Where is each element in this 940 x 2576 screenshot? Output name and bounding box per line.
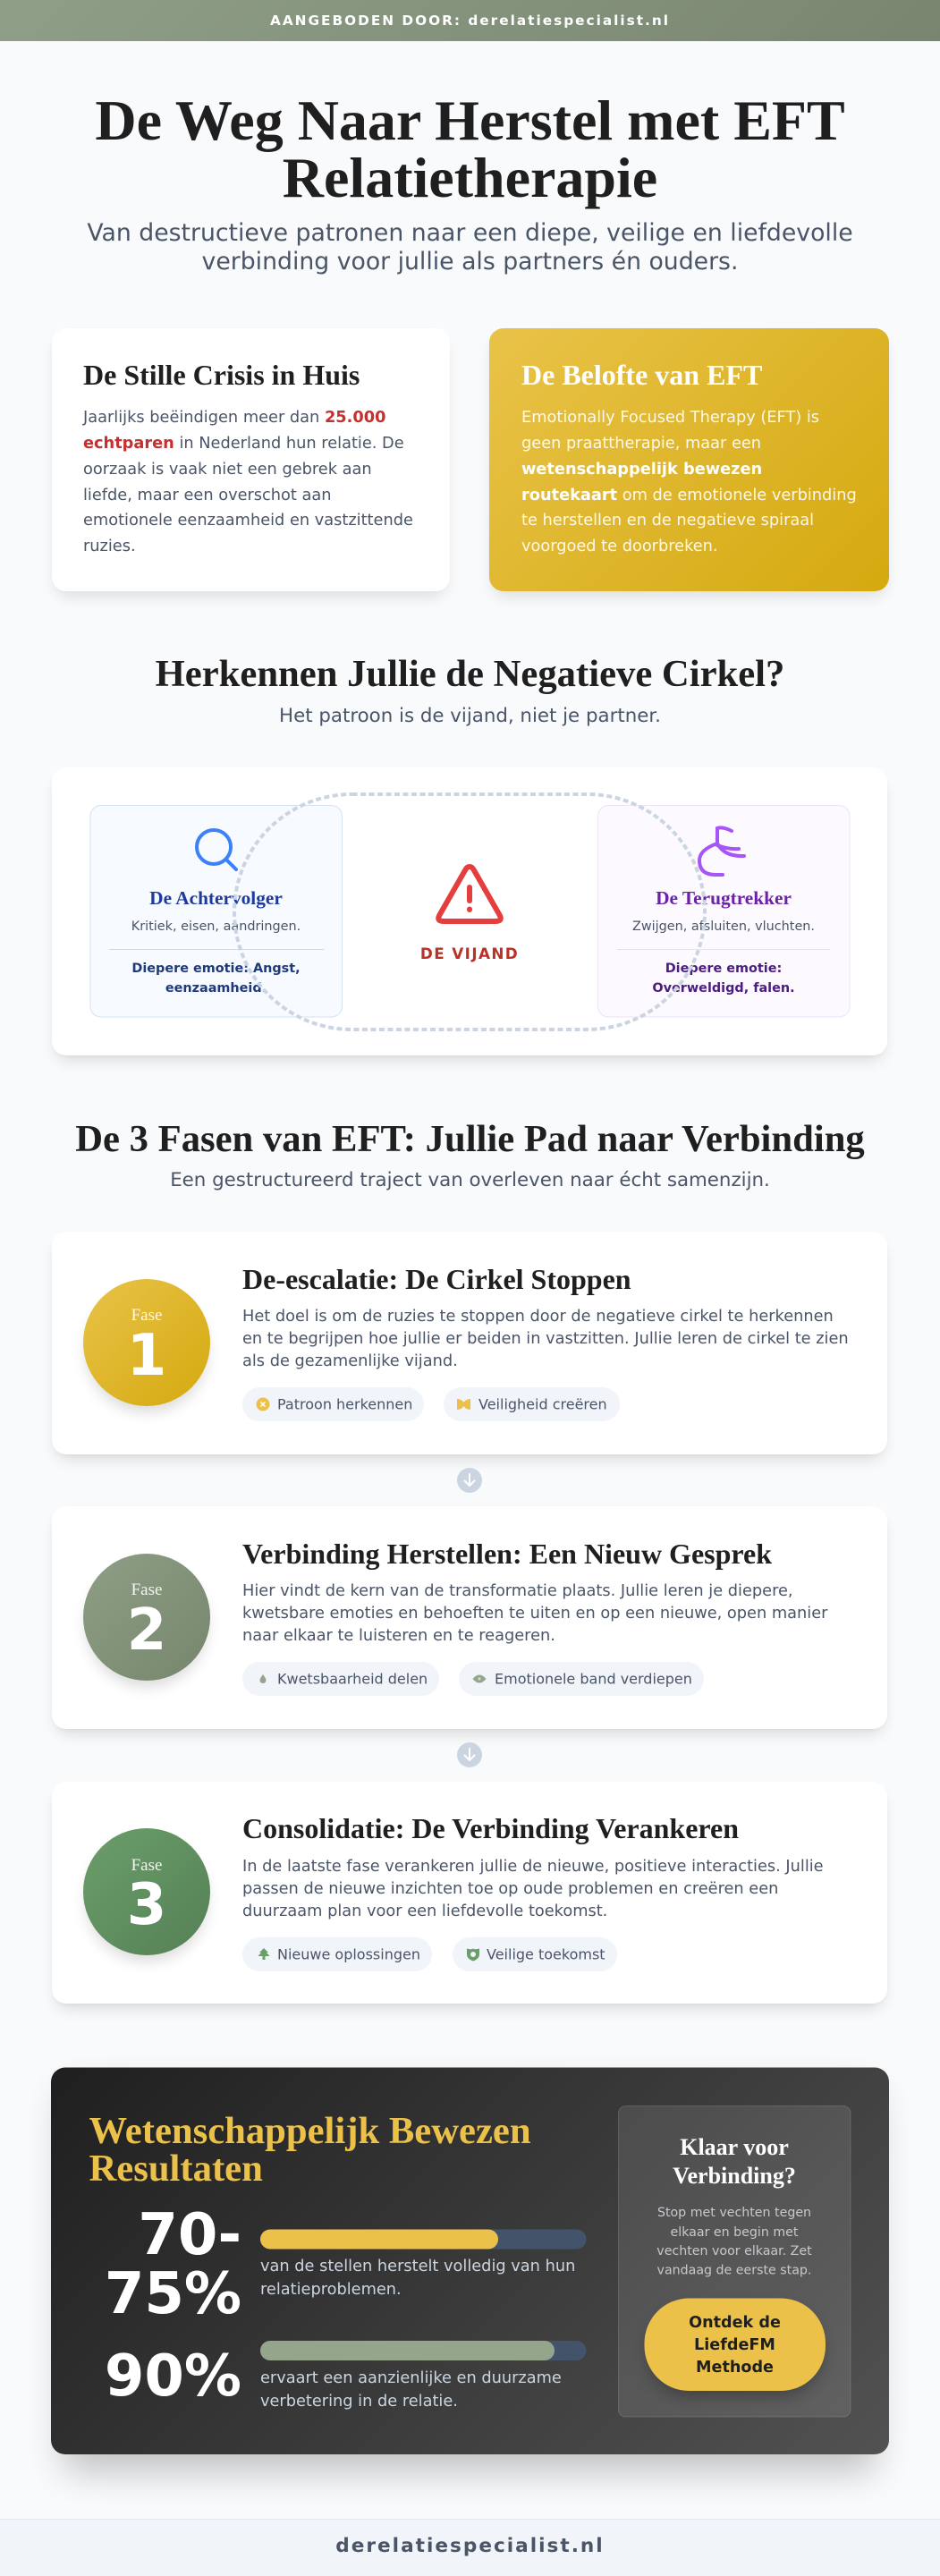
subheading: negative cycle: Het patroon is de vijand, niet je partner. <box>279 705 661 727</box>
name: withdrawer: De Terugtrekker <box>656 887 792 909</box>
text: phase 1: Het doel is om de ruzies te stoppen door de negatieve cirkel te herkennen <box>242 1308 834 1326</box>
deeper emotion: withdrawer: Overweldigd, falen. <box>652 981 795 996</box>
title: phase 2: Verbinding Herstellen: Een Nieuw Gesprek <box>242 1538 772 1570</box>
behaviour: withdrawer: Zwijgen, afsluiten, vluchten. <box>632 919 815 934</box>
text: promise body: voorgoed te doorbreken. <box>521 538 718 555</box>
subtitle: Van destructieve patronen naar een diepe, veilige en liefdevolle <box>87 219 853 247</box>
badge: phase 2: Fase <box>131 1580 162 1599</box>
chip: new solutions <box>242 1937 432 1971</box>
heading: phases: De 3 Fasen van EFT: Jullie Pad naar Verbinding <box>75 1118 865 1160</box>
chip: recognise pattern <box>242 1387 424 1421</box>
deeper emotion: pursuer: eenzaamheid. <box>165 981 267 996</box>
text: call to action: vechten voor elkaar. Zet <box>656 2244 812 2258</box>
badge: phase 3 <box>83 1828 210 1962</box>
panel: call to action <box>619 2106 851 2417</box>
text: promise body: routekaart <box>521 487 618 504</box>
text: phase 3: passen de nieuwe inzichten toe op oude problemen en creëren een <box>242 1880 778 1898</box>
icon: magnifier <box>197 830 236 869</box>
badge: phase 2 <box>83 1554 210 1687</box>
dashed cycle ring <box>234 794 705 1030</box>
name: pursuer: De Achtervolger <box>149 887 283 909</box>
arrow: phase 2 to 3 <box>457 1742 482 1767</box>
chip: create safety: Veiligheid creëren <box>478 1395 607 1413</box>
arrow: phase 1 to 2 <box>457 1468 482 1493</box>
text: phase 1: en te begrijpen hoe jullie er beiden in vastzitten. Jullie leren de cirkel te zien <box>242 1330 849 1348</box>
panel: scientific results <box>51 2068 889 2472</box>
text: promise body: Emotionally Focused Therapy (EFT) is <box>521 409 819 427</box>
text: crisis body: in Nederland hun relatie. De <box>179 435 404 453</box>
chip: deepen bond: Emotionele band verdiepen <box>495 1671 692 1687</box>
card: pursuer <box>90 805 342 1017</box>
heading: call to action: Verbinding? <box>673 2163 796 2189</box>
top banner <box>0 0 940 41</box>
text: promise body: wetenschappelijk bewezen <box>521 461 762 479</box>
card: withdrawer <box>597 805 850 1017</box>
badge: phase 3: Fase <box>131 1856 162 1875</box>
stat: 70-75%: 75% <box>105 2261 241 2327</box>
badge: phase 3: 3 <box>127 1872 166 1938</box>
stat: 90%: 90% <box>105 2343 241 2410</box>
footer: derelatiespecialist.nl <box>335 2535 605 2557</box>
heading: results: Wetenschappelijk Bewezen <box>89 2110 531 2152</box>
chip: deepen bond <box>459 1662 704 1696</box>
text: crisis body: echtparen <box>83 435 174 453</box>
stat: 90%: verbetering in de relatie. <box>260 2393 458 2411</box>
text: phase 2: naar elkaar te luisteren en te reageren. <box>242 1627 555 1645</box>
button: discover method: Ontdek de <box>689 2314 781 2332</box>
text: call to action: Stop met vechten tegen <box>657 2206 811 2220</box>
stat: 90% <box>105 2341 587 2411</box>
deeper emotion: pursuer: Diepere emotie: Angst, <box>131 962 301 976</box>
badge: phase 2: 2 <box>127 1597 166 1664</box>
chip: share vulnerability <box>242 1662 439 1696</box>
text: crisis body: Jaarlijks beëindigen meer dan 25.000 <box>83 409 385 427</box>
text: crisis body: liefde, maar een overschot aan <box>83 487 332 504</box>
text: phase 1: als de gezamenlijke vijand. <box>242 1352 458 1370</box>
icon: withdrawer <box>699 827 744 875</box>
text: phase 2: Hier vindt de kern van de transformatie plaats. Jullie leren je diepere, <box>242 1582 793 1600</box>
text: promise body: geen praattherapie, maar een <box>521 435 761 453</box>
text: crisis body: emotionele eenzaamheid en vastzittende <box>83 512 413 530</box>
title: Relatietherapie <box>283 146 657 209</box>
text: call to action: elkaar en begin met <box>671 2225 799 2240</box>
text: promise body: te herstellen en de negatieve spiraal <box>521 512 814 530</box>
chip: share vulnerability: Kwetsbaarheid delen <box>277 1671 428 1687</box>
badge: phase 1: 1 <box>127 1323 166 1389</box>
badge: phase 1: Fase <box>131 1306 162 1325</box>
panel: phase 2 <box>52 1506 887 1735</box>
stat: 70-75%: van de stellen herstelt volledig van hun <box>260 2258 575 2275</box>
stat: 70-75%: relatieproblemen. <box>260 2281 402 2299</box>
stat: 70-75%: 70- <box>138 2202 241 2268</box>
panel: crisis <box>52 328 450 597</box>
text: call to action: vandaag de eerste stap. <box>657 2263 811 2277</box>
label: the enemy: DE VIJAND <box>420 945 519 962</box>
button: discover method: Methode <box>696 2359 774 2377</box>
title: phase 3: Consolidatie: De Verbinding Verankeren <box>242 1812 739 1844</box>
behaviour: pursuer: Kritiek, eisen, aandringen. <box>131 919 301 934</box>
heading: negative cycle: Herkennen Jullie de Negatieve Cirkel? <box>156 653 784 695</box>
panel: phase 1 <box>52 1232 887 1461</box>
top banner: AANGEBODEN DOOR: derelatiespecialist.nl <box>270 13 670 29</box>
button: discover method: LiefdeFM <box>694 2336 775 2354</box>
icon: warning triangle <box>438 867 501 921</box>
text: promise body: om de emotionele verbinding <box>622 487 857 504</box>
heading: promise: De Belofte van EFT <box>521 359 762 391</box>
text: phase 3: In de laatste fase verankeren jullie de nieuwe, positieve interacties. Jullie <box>242 1858 824 1876</box>
heading: results: Resultaten <box>89 2148 263 2190</box>
deeper emotion: withdrawer: Diepere emotie: <box>665 962 782 976</box>
chip: create safety <box>444 1387 620 1421</box>
text: crisis body: ruzies. <box>83 538 136 555</box>
stat: 70-75% <box>105 2202 587 2327</box>
button: discover method <box>644 2299 826 2397</box>
heading: call to action: Klaar voor <box>680 2134 789 2160</box>
panel: promise <box>489 328 889 597</box>
chip: recognise pattern: Patroon herkennen <box>277 1395 412 1413</box>
panel: negative cycle <box>52 767 887 1062</box>
badge: phase 1 <box>83 1279 210 1412</box>
text: crisis body: oorzaak is vaak niet een gebrek aan <box>83 461 372 479</box>
heading: crisis: De Stille Crisis in Huis <box>83 359 360 391</box>
chip: safe future <box>453 1937 617 1971</box>
subtitle: verbinding voor jullie als partners én ouders. <box>202 248 738 275</box>
text: phase 2: kwetsbare emoties en behoeften te uiten en op een nieuwe, open manier <box>242 1605 828 1623</box>
chip: safe future: Veilige toekomst <box>487 1946 605 1962</box>
title: De Weg Naar Herstel met EFT <box>95 89 845 152</box>
title: phase 1: De-escalatie: De Cirkel Stoppen <box>242 1263 631 1295</box>
footer <box>0 2519 940 2576</box>
panel: phase 3 <box>52 1782 887 2010</box>
stat: 90%: ervaart een aanzienlijke en duurzame <box>260 2369 562 2387</box>
text: phase 3: duurzaam plan voor een liefdevolle toekomst. <box>242 1902 607 1920</box>
chip: new solutions: Nieuwe oplossingen <box>277 1946 420 1962</box>
subheading: phases: Een gestructureerd traject van overleven naar écht samenzijn. <box>170 1169 770 1191</box>
